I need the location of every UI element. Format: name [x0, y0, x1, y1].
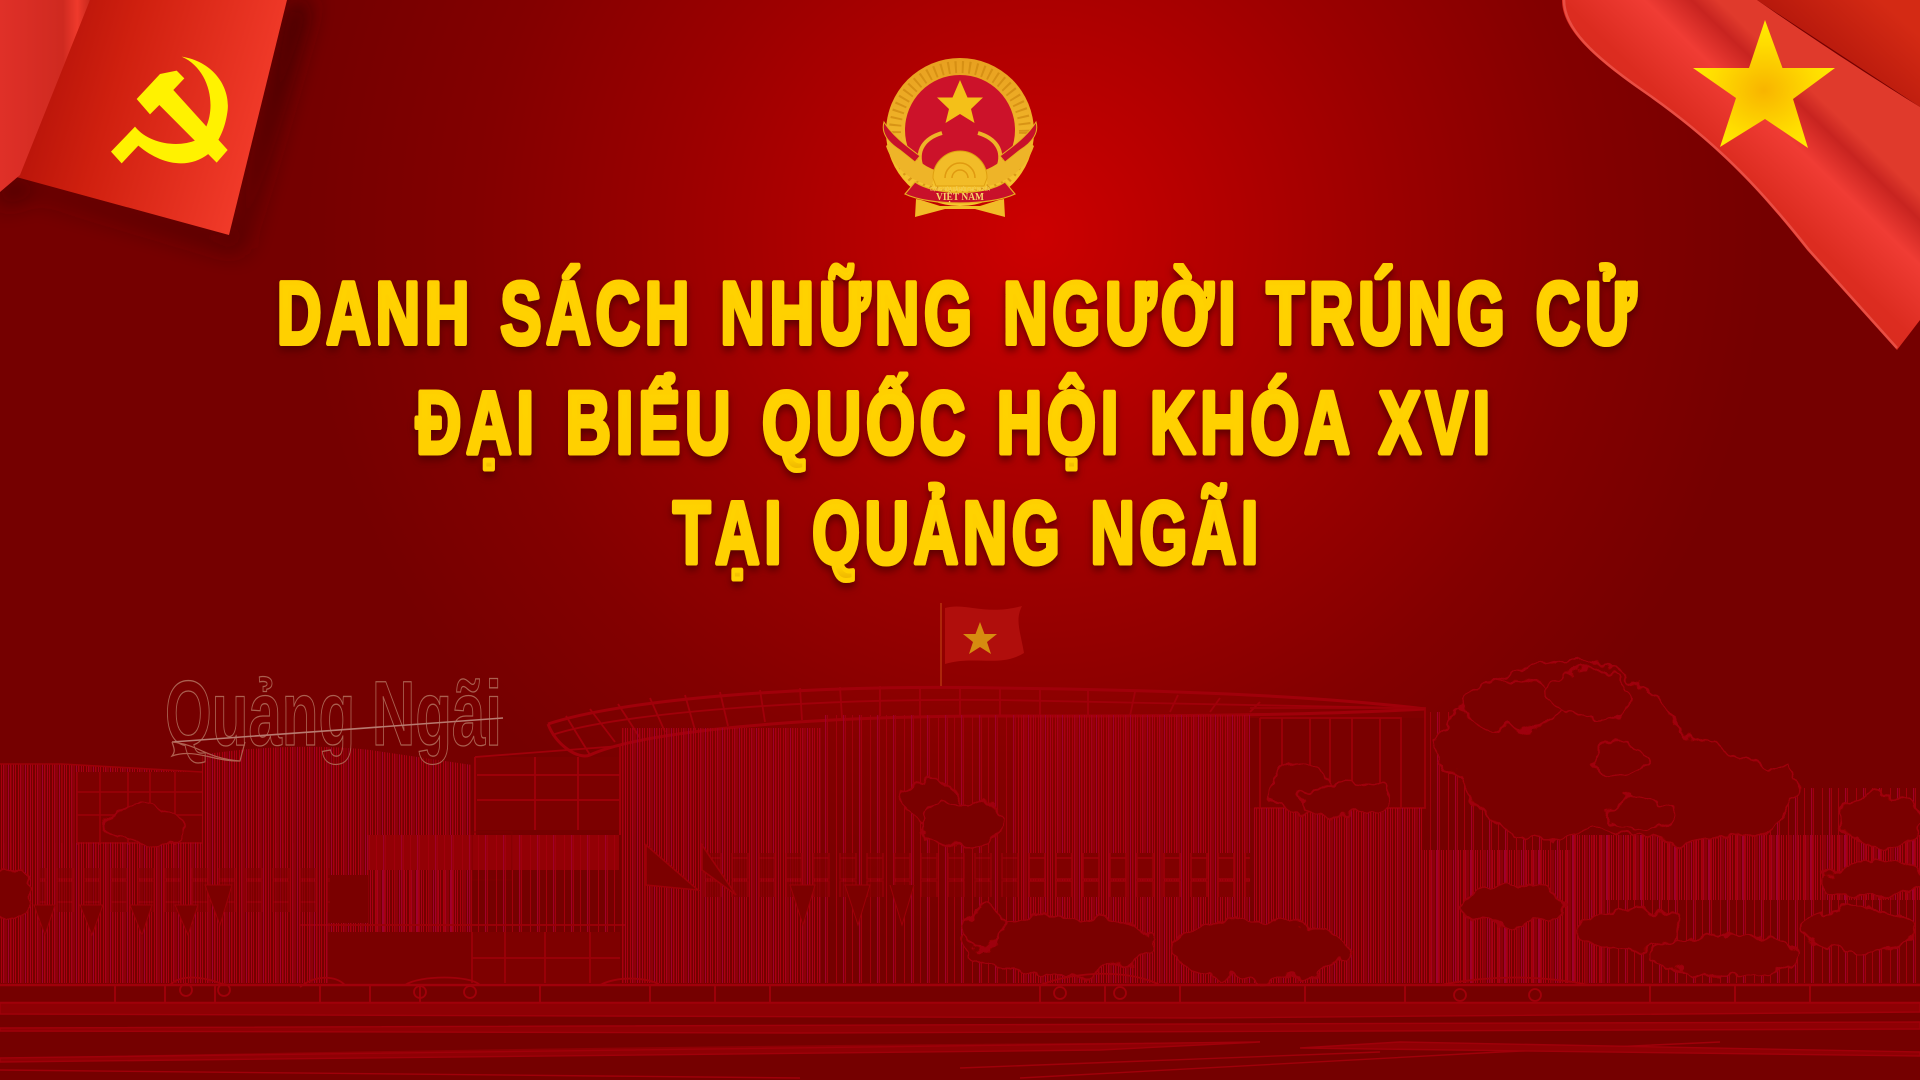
emblem star: [937, 80, 983, 123]
flag body: [9, 0, 287, 235]
road surface lines: [0, 1003, 1920, 1078]
emblem wheat sprigs: [920, 133, 1000, 168]
flag shadow: [0, 0, 310, 250]
colonnade window frames: [1018, 853, 1250, 897]
right wooded facade: [1425, 712, 1920, 983]
left wing building: [0, 764, 202, 983]
emblem name: VIỆT NAM: [936, 190, 985, 203]
emblem ring hatching: [895, 67, 1025, 197]
emblem red disc: [905, 75, 1015, 185]
main colonnade: [621, 728, 821, 983]
ribbon: [1562, 0, 1920, 350]
vietnamese flag ribbon, top right: [1562, 0, 1920, 350]
wooded hill silhouette: [1432, 662, 1794, 845]
title: [277, 264, 1641, 582]
watermark logo: Quang Ngai: [165, 663, 503, 765]
emblem cog wheel: [933, 151, 987, 186]
icon: hammer and sickle: [111, 57, 228, 163]
colonnade window frames centre: [700, 853, 1020, 897]
emblem banner: [905, 182, 1015, 203]
emblem ribbon sides: [883, 122, 1037, 162]
communist party flag, top left: [0, 0, 310, 250]
title line 2: ĐẠI BIỂU QUỐC HỘI KHÓA XVI: [416, 373, 1495, 472]
lower facade railing band: [0, 843, 328, 983]
emblem ring: [886, 58, 1034, 206]
watermark logo: Quang Ngai: Quảng Ngãi: [165, 663, 502, 765]
small national flag on pole: [941, 603, 1024, 686]
emblem base: [915, 199, 1005, 217]
flag fold: [0, 0, 90, 192]
flags in front of building: [34, 845, 914, 983]
lower left window frames: [40, 868, 330, 912]
emblem cog arcs: [945, 163, 975, 178]
tree line art: [0, 662, 1920, 980]
national emblem of Vietnam: [883, 58, 1037, 217]
right window block: [1250, 708, 1605, 983]
illustration: National Assembly building line art: [0, 662, 1920, 1078]
icon: yellow star: [1693, 20, 1835, 148]
roof lattice: [548, 686, 1425, 756]
title line 3: TẠI QUẢNG NGÃI: [673, 483, 1263, 582]
centre colonnade block: [202, 746, 625, 983]
emblem caption: CỘNG HÒA XÃ HỘI CHỦ NGHĨA: [930, 186, 990, 193]
ribbon edge highlight: [1564, 0, 1897, 348]
cars and pavement railing: [0, 974, 1920, 1003]
emblem lower wheat: [886, 135, 1034, 186]
right colonnade: [1018, 715, 1250, 983]
